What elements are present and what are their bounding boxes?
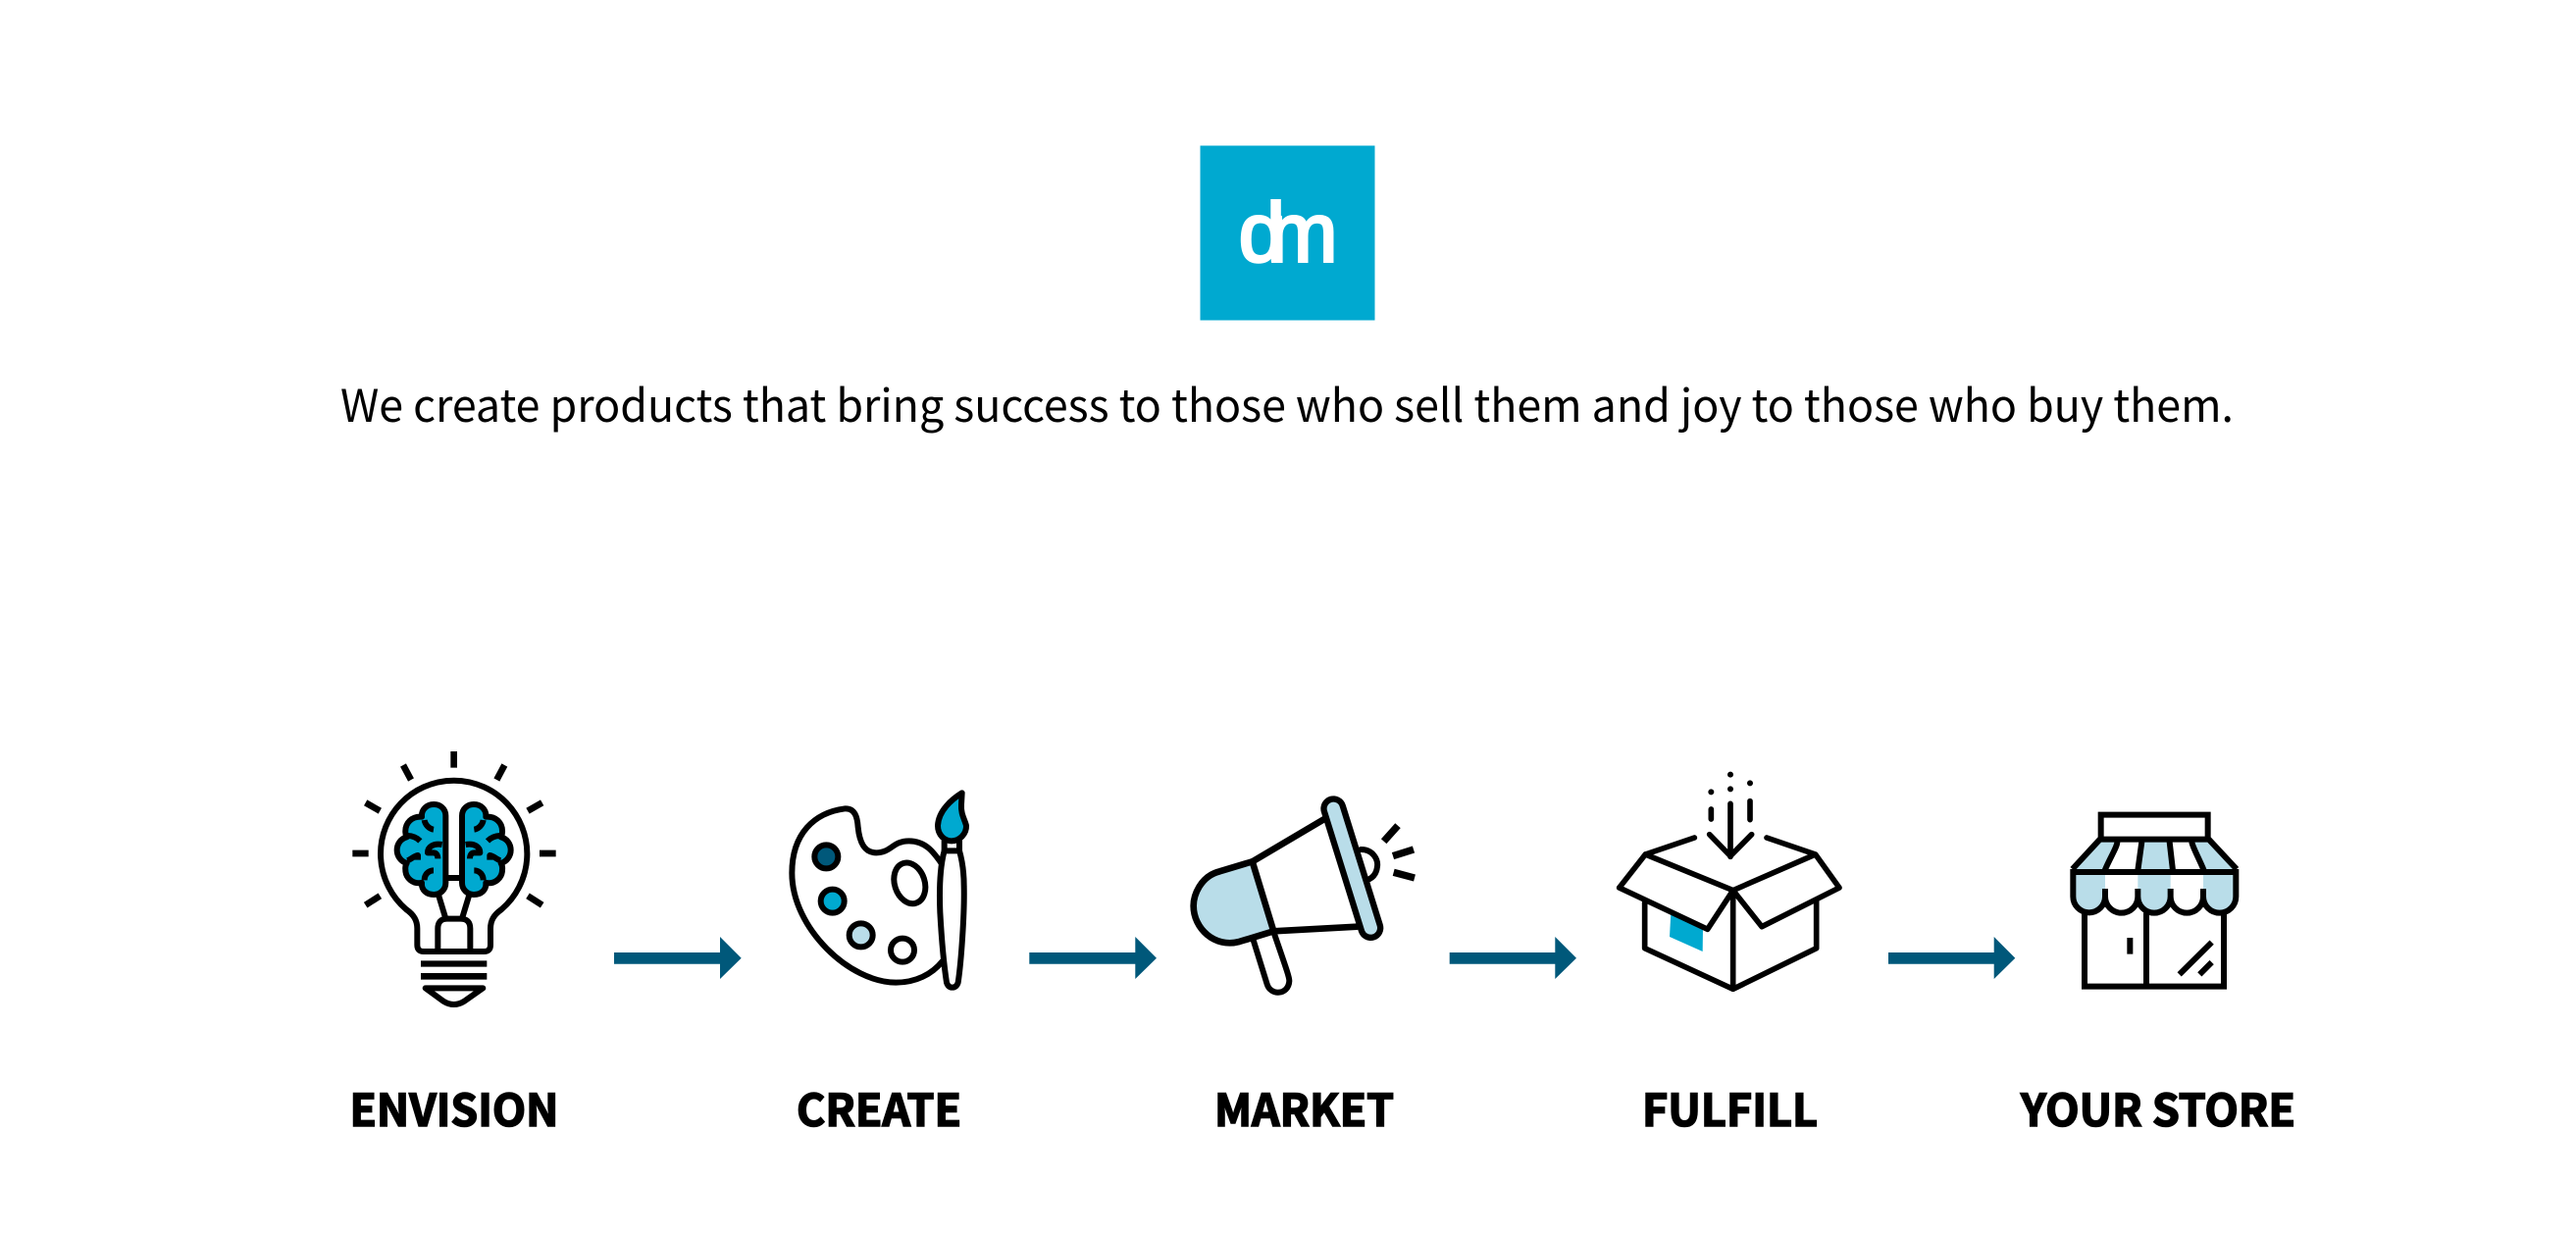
label: market: MARKET bbox=[1214, 1075, 1394, 1139]
tagline: We create products that bring success to those who sell them and joy to those who buy them. bbox=[340, 371, 2234, 436]
icon: storefront bbox=[2073, 815, 2237, 987]
logo: dm bbox=[1201, 145, 1375, 320]
arrow: envision to create bbox=[614, 937, 742, 979]
arrow: create to market bbox=[1029, 937, 1157, 979]
icon: megaphone bbox=[1194, 808, 1415, 993]
label: create: CREATE bbox=[797, 1075, 961, 1139]
label: fulfill: FULFILL bbox=[1642, 1075, 1818, 1139]
arrow: fulfill to your store bbox=[1888, 937, 2015, 979]
logo: dm: d bbox=[1239, 186, 1285, 281]
icon: open box with arrow bbox=[1620, 772, 1839, 989]
label: your store: YOUR STORE bbox=[2020, 1075, 2295, 1139]
icon: light bulb with brain bbox=[352, 751, 556, 1004]
label: envision: ENVISION bbox=[349, 1075, 559, 1139]
arrow: market to fulfill bbox=[1450, 937, 1576, 979]
logo: dm: m bbox=[1268, 186, 1338, 281]
icon: palette and brush bbox=[792, 793, 966, 988]
